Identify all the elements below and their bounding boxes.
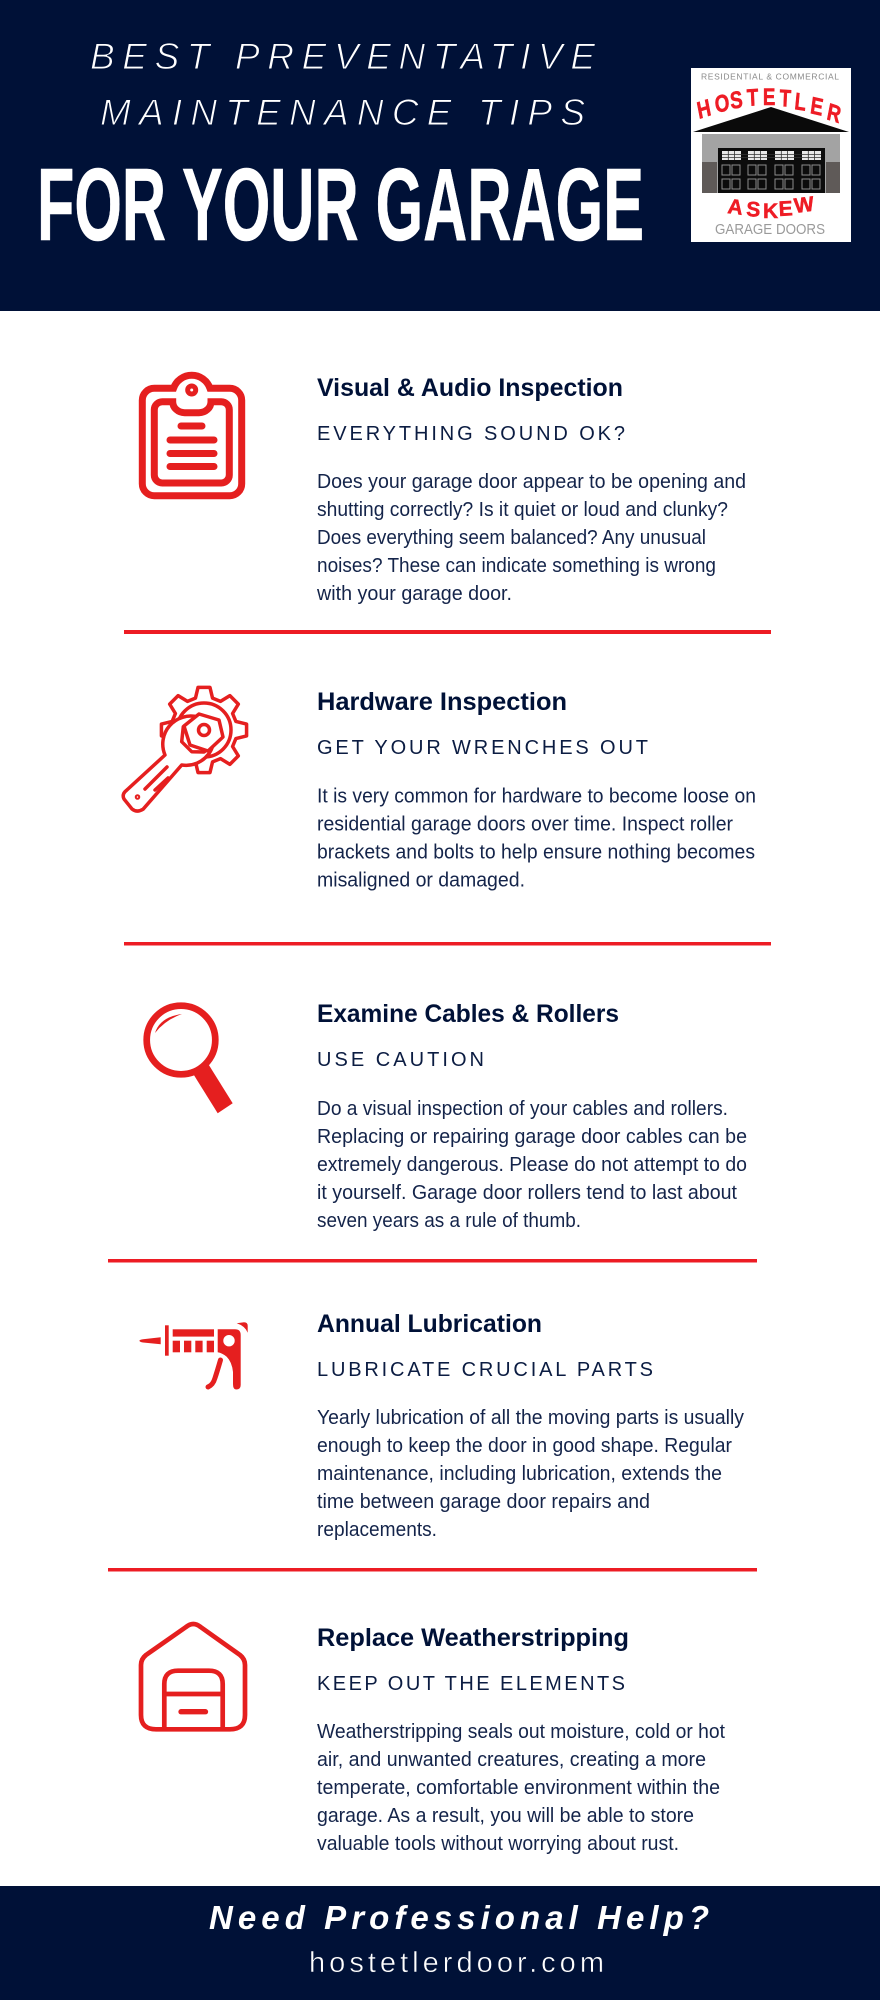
subheading: LUBRICATE CRUCIAL PARTS — [317, 1359, 653, 1381]
footer banner — [0, 1886, 880, 2000]
panel: hardware inspection — [123, 687, 756, 892]
logo: Hostetler Askew Garage Doors — [691, 68, 851, 242]
body text: residential garage doors over time. Inspect roller — [317, 814, 733, 836]
body text: temperate, comfortable environment within the — [317, 1777, 720, 1799]
subheading: USE CAUTION — [317, 1049, 484, 1071]
icon: garage building — [141, 1624, 245, 1729]
icon: clipboard — [142, 375, 242, 496]
logo wordmark: garage doors: GARAGE DOORS — [715, 221, 825, 238]
body text: Yearly lubrication of all the moving parts is usually — [317, 1407, 744, 1429]
logo stone right — [826, 162, 840, 193]
body text: air, and unwanted creatures, creating a more — [317, 1749, 706, 1771]
body text: Does everything seem balanced? Any unusual — [317, 527, 706, 549]
icon: caulk gun — [139, 1322, 248, 1390]
logo roof — [693, 107, 849, 132]
heading: Visual & Audio Inspection — [317, 374, 623, 402]
body text: Replacing or repairing garage door cables can be — [317, 1126, 747, 1148]
body text: noises? These can indicate something is wrong — [317, 555, 716, 577]
body text: enough to keep the door in good shape. Regular — [317, 1435, 732, 1457]
body text: with your garage door. — [316, 583, 512, 605]
subheading: EVERYTHING SOUND OK? — [317, 423, 625, 445]
body text: replacements. — [317, 1519, 437, 1541]
panel: examine cables and rollers — [147, 1000, 747, 1232]
logo building siding — [702, 134, 840, 193]
body text — [317, 1407, 744, 1541]
body text: garage. As a result, you will be able to store — [317, 1805, 694, 1827]
body text — [317, 1098, 747, 1232]
body text: brackets and bolts to help ensure nothing becomes — [317, 842, 755, 864]
heading: Annual Lubrication — [317, 1310, 542, 1338]
body text: misaligned or damaged. — [317, 870, 525, 892]
panel: visual and audio inspection — [142, 374, 746, 605]
logo wordmark: askew: ASKEW — [726, 193, 815, 223]
panel: replace weatherstripping — [141, 1624, 725, 1855]
body text — [316, 471, 746, 605]
body text: Do a visual inspection of your cables and rollers. — [317, 1098, 728, 1120]
body text: it yourself. Garage door rollers tend to last about — [317, 1182, 737, 1204]
body text — [317, 1721, 725, 1855]
body text: Does your garage door appear to be opening and — [317, 471, 746, 493]
body text: Weatherstripping seals out moisture, cold or hot — [317, 1721, 725, 1743]
logo garage door — [718, 148, 825, 193]
title line: maintenance tips: MAINTENANCE TIPS — [100, 92, 585, 133]
heading: Hardware Inspection — [317, 688, 567, 716]
body text: shutting correctly? Is it quiet or loud and clunky? — [317, 499, 728, 521]
subheading: GET YOUR WRENCHES OUT — [317, 737, 648, 759]
body text: seven years as a rule of thumb. — [317, 1210, 581, 1232]
heading: Replace Weatherstripping — [317, 1624, 629, 1652]
header banner — [0, 0, 880, 311]
body text: time between garage door repairs and — [317, 1491, 650, 1513]
body text: extremely dangerous. Please do not attempt to do — [317, 1154, 747, 1176]
heading: Examine Cables & Rollers — [317, 1000, 619, 1028]
panel: annual lubrication — [139, 1310, 744, 1541]
subheading: KEEP OUT THE ELEMENTS — [317, 1673, 625, 1695]
body text — [317, 786, 756, 892]
body text: valuable tools without worrying about rust. — [317, 1833, 679, 1855]
website address: hostetlerdoor.com — [309, 1947, 604, 1979]
body text: maintenance, including lubrication, extends the — [317, 1463, 722, 1485]
body text: It is very common for hardware to become loose on — [317, 786, 756, 808]
logo stone left — [702, 162, 717, 193]
icon: magnifying glass — [147, 1006, 233, 1113]
title line: best preventative: BEST PREVENTATIVE — [90, 36, 596, 77]
logo wordmark: hostetler: HOSTETLER — [695, 84, 844, 129]
call to action: Need Professional Help? — [209, 1899, 709, 1936]
logo tagline: RESIDENTIAL & COMMERCIAL — [701, 72, 839, 82]
icon: wrench and gear — [123, 687, 247, 811]
